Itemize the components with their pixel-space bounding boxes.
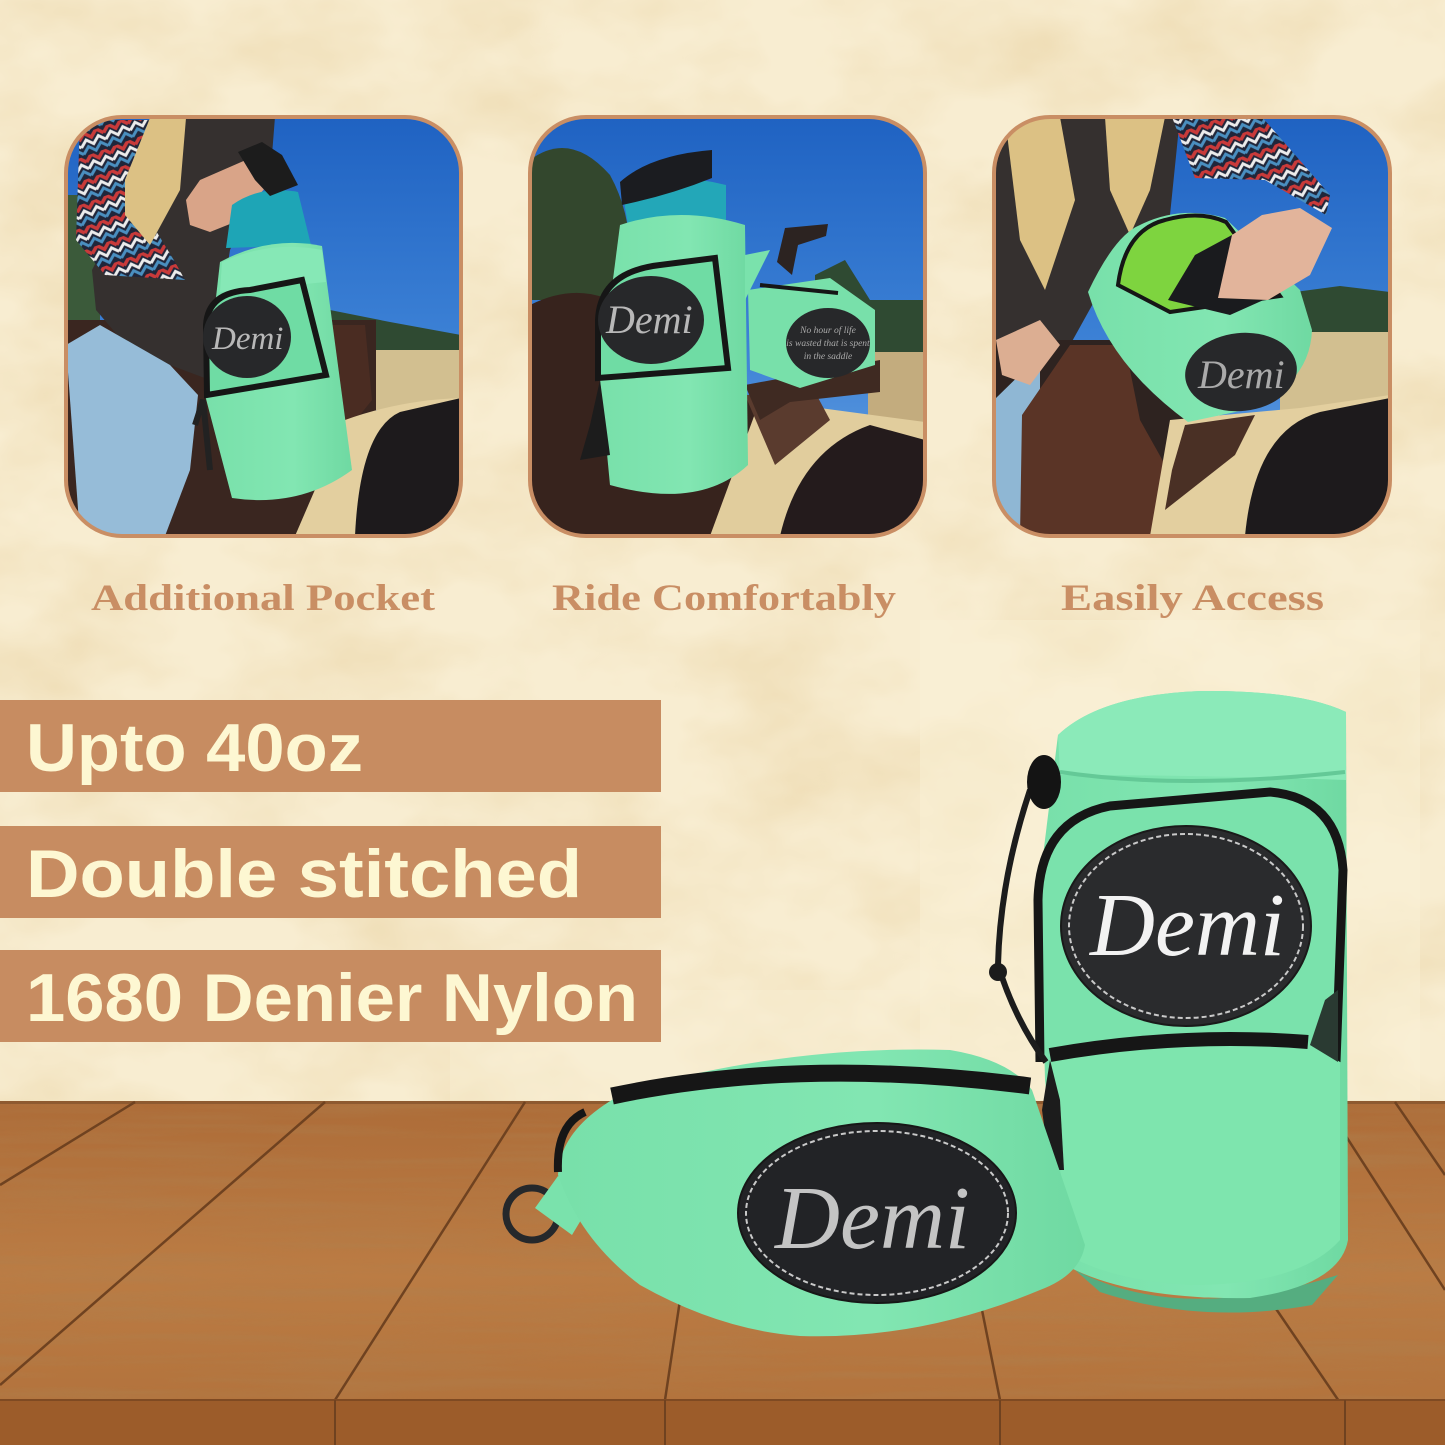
- panel: additional pocket photo: Demi: [211, 321, 283, 357]
- banner: double stitched: Double stitched: [26, 836, 582, 912]
- panel: ride comfortably photo: No hour of life: [799, 325, 856, 336]
- panel 1 border: [66, 117, 461, 536]
- caption: ride comfortably: Ride Comfortably: [552, 578, 897, 619]
- panel: ride comfortably photo: [530, 117, 925, 536]
- panel 3 border: [994, 117, 1390, 536]
- panel: ride comfortably photo: Demi: [605, 297, 693, 342]
- panel 2 border: [530, 117, 925, 536]
- banner: double stitched: [0, 826, 661, 918]
- product: upright bottle holder: Demi: [1088, 876, 1285, 975]
- product: upright bottle holder: [989, 691, 1348, 1313]
- banner: upto 40oz: [0, 700, 661, 792]
- panel: easily access photo: [994, 117, 1390, 536]
- banner: 1680 denier nylon: 1680 Denier Nylon: [26, 960, 638, 1036]
- product: saddle pouch: Demi: [773, 1169, 970, 1268]
- product: saddle pouch: [506, 1050, 1085, 1336]
- wooden floor: [0, 1101, 1445, 1445]
- banner: upto 40oz: Upto 40oz: [26, 710, 363, 786]
- panel: ride comfortably photo: is wasted that is spent: [786, 339, 870, 349]
- caption: easily access: Easily Access: [1061, 578, 1324, 619]
- parchment background: [0, 0, 1445, 1102]
- caption: additional pocket: Additional Pocket: [91, 578, 436, 619]
- panel: additional pocket photo: [66, 117, 461, 536]
- panel: easily access photo: Demi: [1197, 352, 1285, 397]
- panel: ride comfortably photo: in the saddle: [804, 352, 852, 362]
